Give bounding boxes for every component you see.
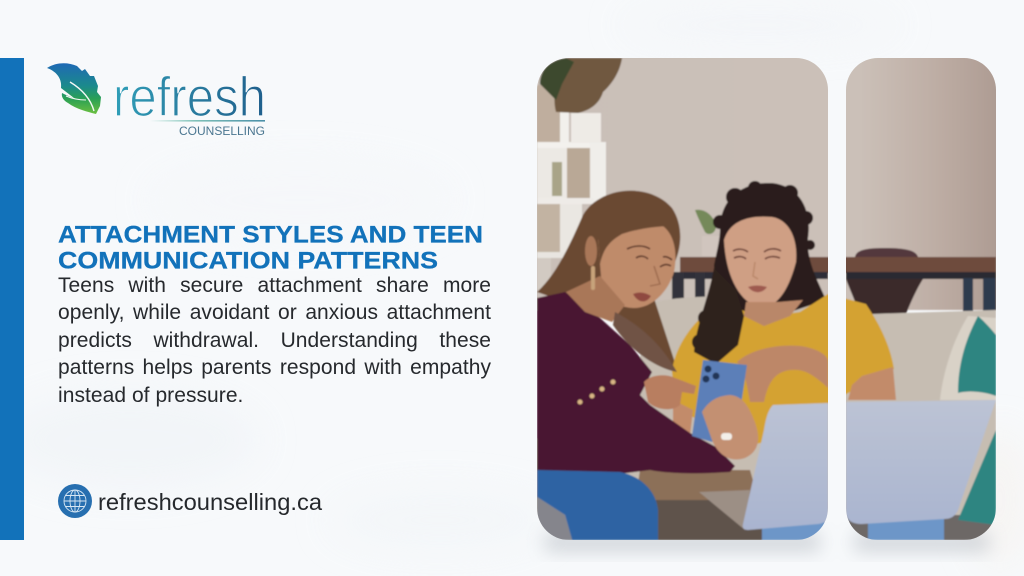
mother: jeans <box>537 470 658 540</box>
mother: face and neck <box>566 216 675 322</box>
mother: hand on phone <box>702 395 758 459</box>
heading: COMMUNICATION PATTERNS <box>58 248 438 274</box>
daughter: arm behind phone <box>673 400 693 436</box>
small plant <box>694 209 717 235</box>
wall <box>530 50 1000 310</box>
body text: openly, while avoidant or anxious attachment <box>58 301 491 324</box>
logo wordmark: refresh <box>113 65 266 128</box>
body text: predicts withdrawal. Understanding these <box>58 328 491 352</box>
plant and vase <box>540 58 622 143</box>
table <box>672 248 996 318</box>
cushion <box>940 316 996 525</box>
body text <box>58 274 491 406</box>
lap, right panel <box>846 515 996 540</box>
heading <box>58 222 483 274</box>
daughter: long curl <box>692 268 744 364</box>
heading: ATTACHMENT STYLES AND TEEN <box>58 222 483 248</box>
mother: hair strand <box>613 312 677 372</box>
phone <box>692 360 747 442</box>
sweater buttons <box>578 380 616 404</box>
daughter: hair <box>712 181 826 312</box>
logo subtitle: COUNSELLING <box>179 124 265 138</box>
ring <box>721 433 732 440</box>
mother: maroon sweater <box>537 292 735 474</box>
shelf unit <box>537 85 606 292</box>
website link <box>58 484 322 518</box>
laptop lid <box>743 400 996 530</box>
body text: instead of pressure. <box>58 384 243 406</box>
left accent bar <box>0 58 24 540</box>
website url: refreshcounselling.ca <box>98 489 322 515</box>
lap area <box>638 468 763 540</box>
body text: Teens with secure attachment share more <box>58 274 491 296</box>
photo: mother and teen daughter on a sofa <box>530 50 1000 540</box>
mother: hair back <box>537 191 680 372</box>
body text: patterns helps parents respond with empathy <box>58 356 491 379</box>
daughter: jeans <box>762 518 944 540</box>
icon: globe <box>58 484 92 518</box>
logo: Refresh Counselling <box>47 63 266 138</box>
daughter: yellow shirt <box>672 294 894 445</box>
sofa <box>530 296 996 540</box>
icon: leaf <box>47 63 101 114</box>
daughter: face and arms <box>724 217 896 402</box>
laptop base <box>699 490 750 530</box>
photo shadow <box>545 532 989 552</box>
mother: pointing hand <box>644 375 696 409</box>
